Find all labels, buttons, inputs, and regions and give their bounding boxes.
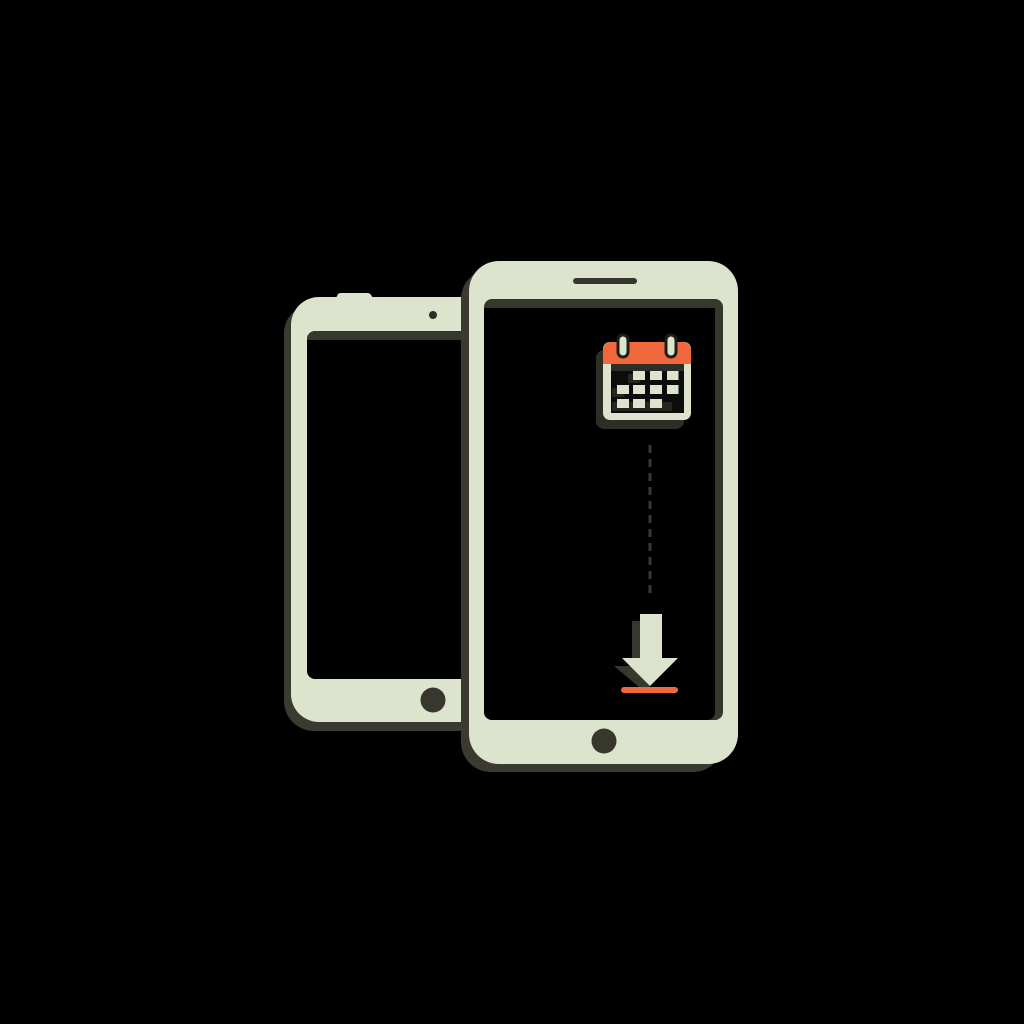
left phone screen [307,331,461,679]
right phone [461,261,738,772]
left phone camera [429,311,437,319]
right phone screen [484,299,723,720]
dashed connector line [648,445,652,598]
arrow body [622,614,678,686]
left phone body [291,297,461,722]
calendar frame [603,342,691,420]
icon: download arrow [614,614,678,693]
orange baseline [621,687,678,693]
calendar rings [618,335,676,357]
left phone side button [336,293,373,298]
calendar shadow [596,350,684,429]
right phone shadow [461,269,723,772]
left phone [284,293,461,731]
calendar inner area [611,362,684,413]
arrow shadow [614,621,650,687]
left phone home button [420,688,446,712]
calendar date cell shadows [612,374,672,411]
icon: calendar [596,335,691,429]
right phone body [469,261,738,764]
calendar orange header [603,342,691,364]
right phone home button [592,728,616,754]
calendar date cells [617,371,678,408]
left phone shadow [284,305,461,731]
right phone speaker [573,278,637,284]
